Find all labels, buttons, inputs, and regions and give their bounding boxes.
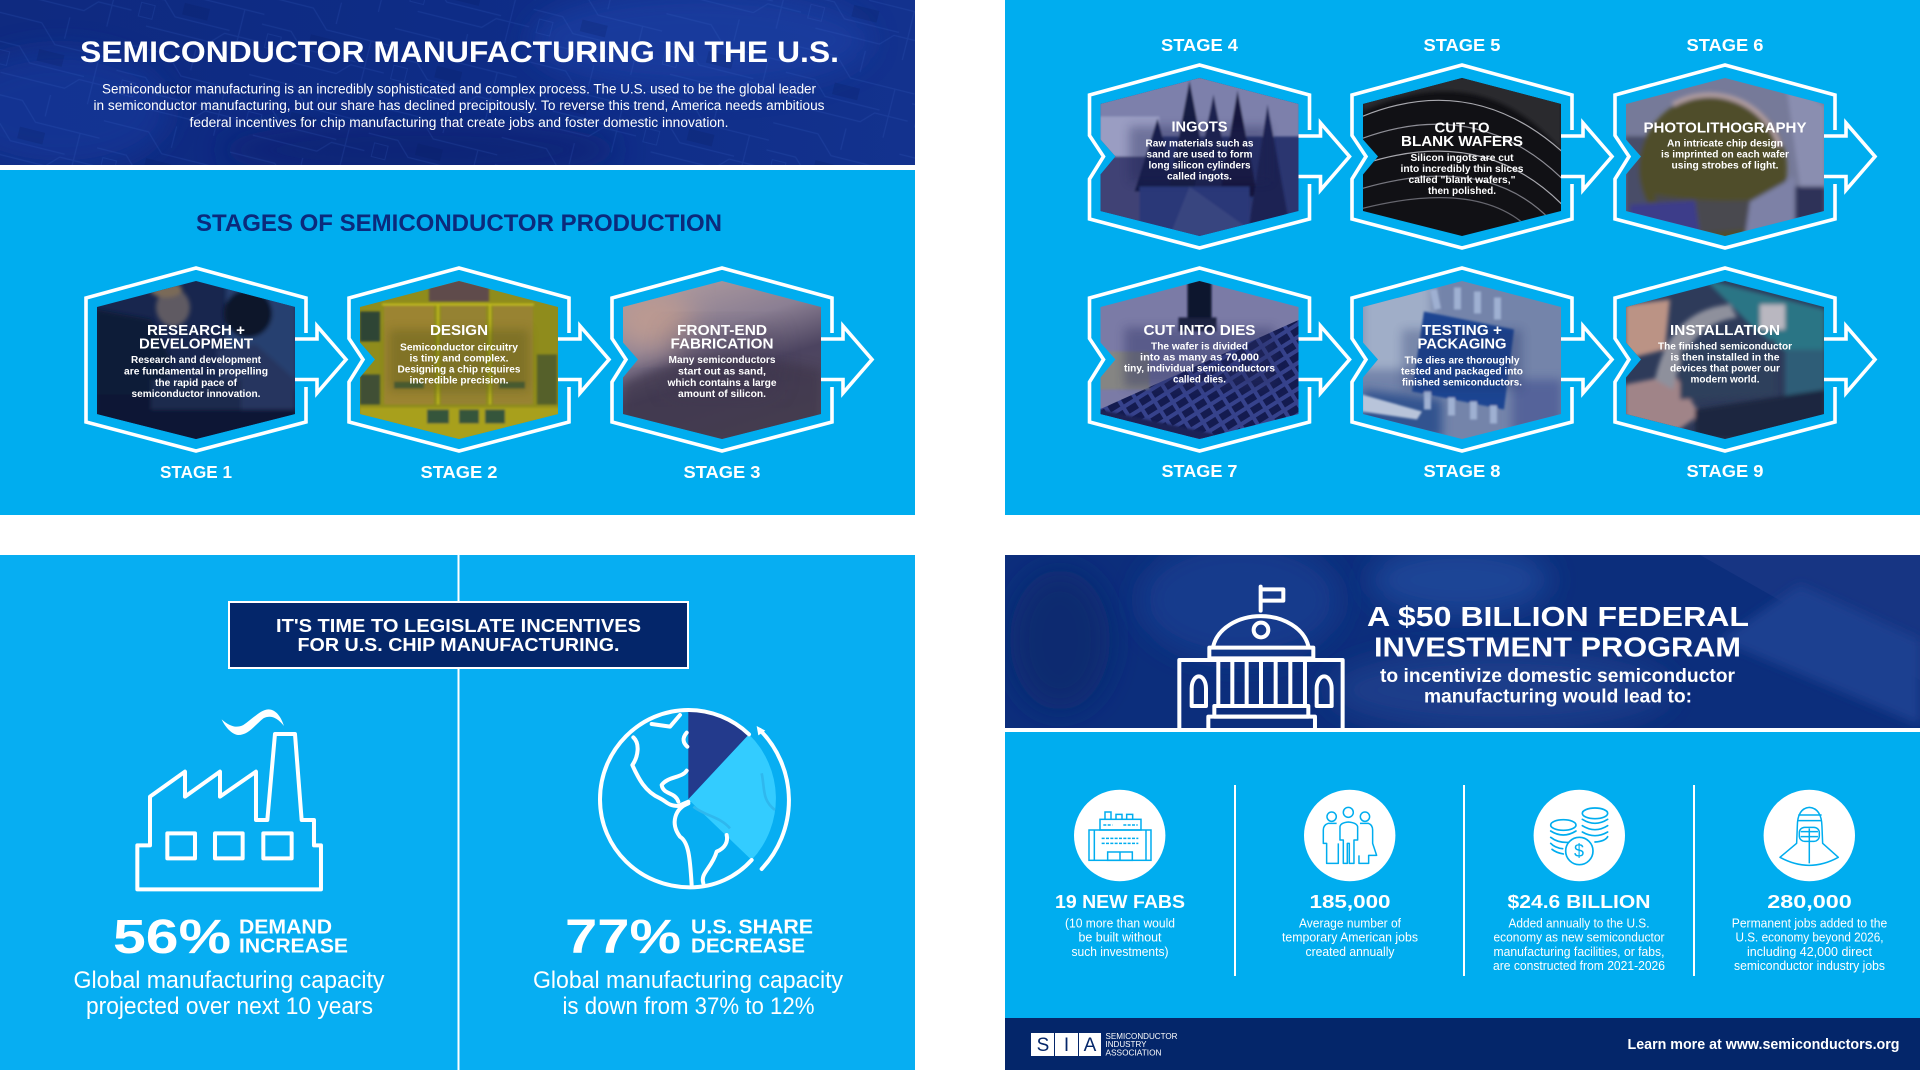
photo: dicing saw	[1100, 278, 1300, 444]
stage text	[1644, 120, 1806, 172]
stage text: into as many as 70,000	[1140, 352, 1259, 364]
stage text: called dies.	[1173, 374, 1226, 386]
stage text: semiconductor innovation.	[132, 388, 261, 400]
logo: SIA: SEMICONDUCTOR	[1106, 1031, 1178, 1041]
stage text: Semiconductor circuitry	[400, 342, 518, 354]
stage text: into incredibly thin slices	[1400, 163, 1524, 175]
intro paragraph: in semiconductor manufacturing, but our share has declined precipitously. To reverse this trend, America needs ambitious	[94, 98, 825, 113]
hexagon outline	[86, 268, 306, 451]
stat: 185,000 temporary jobs: Average number of	[1299, 916, 1401, 930]
stat: 24.6 billion added	[1493, 790, 1665, 973]
icon: coins: $	[1574, 841, 1584, 861]
stage text: which contains a large	[667, 377, 777, 389]
arrow	[1298, 326, 1350, 393]
stage text: called ingots.	[1167, 170, 1232, 182]
stage labels 1-3	[160, 462, 761, 482]
stage 3: front-end fabrication	[612, 268, 872, 451]
website link text: Learn more at www.semiconductors.org	[1628, 1036, 1900, 1053]
stat: 280,000 permanent jobs: U.S. economy beyond 2026,	[1736, 930, 1884, 944]
stage text	[398, 322, 521, 386]
stat: 56 percent demand increase: DEMAND	[239, 916, 332, 938]
stat: 185,000 temporary jobs	[1282, 790, 1418, 959]
stat: 77 percent share decrease: is down from 37% to 12%	[562, 993, 814, 1020]
main title: SEMICONDUCTOR MANUFACTURING IN THE U.S.	[80, 36, 839, 69]
stage text: DEVELOPMENT	[139, 336, 253, 352]
stage text: is imprinted on each wafer	[1661, 148, 1789, 160]
stage text: are fundamental in propelling	[124, 366, 268, 378]
icon: capitol building	[1179, 587, 1343, 728]
stage text: An intricate chip design	[1667, 138, 1783, 150]
stage text: Raw materials such as	[1146, 138, 1254, 150]
hexagon outline	[1090, 268, 1310, 451]
stage text: Research and development	[131, 354, 261, 366]
hexagon outline	[612, 268, 832, 451]
stage text: tested and packaged into	[1401, 366, 1523, 378]
stat: 280,000 permanent jobs: Permanent jobs added to the	[1732, 916, 1887, 930]
logo: SIA: INDUSTRY	[1106, 1039, 1147, 1049]
stage text: tiny, individual semiconductors	[1124, 362, 1275, 374]
footer bar	[1005, 1018, 1920, 1070]
stage text	[1146, 118, 1254, 182]
stat: 56 percent demand increase: projected over next 10 years	[86, 993, 373, 1020]
panel: title and stages 1-3	[0, 0, 915, 515]
stage text	[1658, 322, 1792, 386]
program heading: INVESTMENT PROGRAM	[1374, 632, 1741, 662]
stat: 24.6 billion added: are constructed from 2021-2026	[1493, 959, 1665, 973]
stage text: incredible precision.	[410, 374, 509, 386]
header band with photo background	[1005, 540, 1920, 732]
stage text: Many semiconductors	[668, 354, 776, 366]
stage text: PACKAGING	[1418, 336, 1506, 352]
stage labels 1-3: STAGE 1	[160, 462, 232, 482]
stat: 19 new fabs: be built without	[1078, 930, 1162, 944]
panel: stages 4-9	[1005, 0, 1920, 515]
logo: SIA: I	[1064, 1035, 1069, 1056]
arrow	[1561, 326, 1612, 393]
stage text: FABRICATION	[670, 336, 774, 352]
stage text: long silicon cylinders	[1148, 160, 1251, 172]
header band with circuit board background	[0, 0, 915, 180]
logo: SIA: A	[1084, 1035, 1097, 1056]
stage text: The finished semiconductor	[1658, 340, 1792, 352]
intro paragraph: Semiconductor manufacturing is an incredibly sophisticated and complex process. The U.S. used to be the global leader	[102, 82, 817, 96]
logo: SIA	[1031, 1031, 1178, 1058]
stage text: finished semiconductors.	[1402, 376, 1522, 388]
arrow	[1298, 123, 1350, 190]
hexagon outline	[1352, 268, 1572, 451]
stage 7: cut into dies	[1090, 268, 1350, 451]
stage text: RESEARCH +	[147, 322, 245, 339]
stage 2: design	[349, 268, 609, 451]
stat: 24.6 billion added: manufacturing facilities, or fabs,	[1494, 945, 1664, 959]
stat: 56 percent demand increase	[74, 911, 384, 1020]
stat: 185,000 temporary jobs: 185,000	[1310, 891, 1390, 912]
stage labels 7-9	[1162, 461, 1764, 481]
photo: wafers	[1362, 76, 1562, 236]
hexagon outline	[1615, 268, 1835, 451]
hexagon outline	[1615, 65, 1835, 248]
program heading: manufacturing would lead to:	[1424, 686, 1692, 708]
intro paragraph	[94, 82, 825, 130]
stat: 280,000 permanent jobs: semiconductor industry jobs	[1734, 959, 1885, 973]
stage text	[1124, 322, 1275, 386]
stat: 77 percent share decrease: U.S. SHARE	[691, 916, 813, 938]
icon: cleanroom worker	[1764, 790, 1855, 881]
program heading	[1367, 601, 1749, 708]
stage text: modern world.	[1690, 374, 1760, 386]
stage text: is then installed in the	[1670, 352, 1780, 364]
stat: 19 new fabs: such investments)	[1072, 945, 1168, 959]
intro paragraph: federal incentives for chip manufacturing that create jobs and foster domestic innovation.	[190, 115, 728, 130]
stat: 77 percent share decrease: 77%	[565, 911, 681, 964]
section heading: STAGES OF SEMICONDUCTOR PRODUCTION	[196, 210, 722, 237]
stage text: Designing a chip requires	[398, 364, 521, 376]
stage text: called "blank wafers,"	[1408, 174, 1516, 186]
stage text: The dies are thoroughly	[1404, 354, 1520, 366]
arrow	[558, 326, 609, 393]
stage text: CUT INTO DIES	[1144, 322, 1256, 339]
stage text: is tiny and complex.	[410, 352, 509, 364]
program heading: A $50 BILLION FEDERAL	[1367, 601, 1749, 632]
logo: SIA: S	[1037, 1035, 1049, 1056]
stat: 77 percent share decrease: DECREASE	[691, 936, 805, 958]
stage 6: photolithography	[1615, 65, 1875, 248]
stat: 185,000 temporary jobs: temporary American jobs	[1282, 930, 1418, 944]
stage labels 1-3: STAGE 2	[420, 462, 498, 482]
stage text	[1400, 120, 1524, 197]
stage text: amount of silicon.	[678, 388, 766, 400]
stat: 19 new fabs	[1055, 790, 1185, 959]
stage text: PHOTOLITHOGRAPHY	[1644, 120, 1806, 136]
arrow	[1824, 326, 1875, 393]
program heading: to incentivize domestic semiconductor	[1380, 666, 1736, 687]
stat: 56 percent demand increase: 56%	[113, 911, 231, 964]
photo: chip layout	[359, 280, 560, 444]
arrow	[295, 326, 346, 393]
hexagon outline	[349, 268, 569, 451]
arrow	[1561, 123, 1612, 190]
stage 5: cut to blank wafers	[1352, 65, 1612, 248]
callout box: IT'S TIME TO LEGISLATE INCENTIVES	[276, 615, 641, 636]
stage text: then polished.	[1428, 185, 1496, 197]
photo: wafer under light	[1625, 76, 1825, 242]
stage text: Silicon ingots are cut	[1410, 152, 1514, 164]
photo: researchers	[96, 280, 296, 450]
stage text: the rapid pace of	[155, 377, 237, 389]
icon: people	[1304, 790, 1395, 881]
panel: federal investment program	[1005, 540, 1920, 1070]
stat: 77 percent share decrease: Global manufacturing capacity	[533, 967, 843, 994]
icon: coins	[1534, 790, 1625, 881]
stage 9: installation	[1615, 268, 1875, 451]
panel: call to legislate	[0, 555, 915, 1070]
arrow	[821, 326, 872, 393]
photo: silicon ingots	[1100, 76, 1300, 236]
photo: packaged chip	[1362, 280, 1562, 440]
stat: 19 new fabs: (10 more than would	[1065, 916, 1175, 930]
arrow	[1824, 123, 1875, 190]
hexagon outline	[1090, 65, 1310, 248]
stage labels 4-6: STAGE 4	[1161, 35, 1238, 55]
icon: factory	[137, 709, 321, 889]
stage text: DESIGN	[430, 322, 488, 339]
stage text: INSTALLATION	[1670, 322, 1780, 339]
stat: 24.6 billion added: $24.6 BILLION	[1508, 891, 1650, 912]
dividers	[1234, 785, 1695, 976]
stage labels 7-9: STAGE 7	[1162, 461, 1238, 481]
stat: 56 percent demand increase: INCREASE	[239, 936, 348, 958]
stage text: sand are used to form	[1146, 148, 1252, 160]
stage labels 4-6	[1161, 35, 1764, 55]
stage labels 4-6: STAGE 5	[1424, 35, 1501, 55]
stage 1: research and development	[86, 268, 346, 451]
stage text: The wafer is divided	[1151, 340, 1248, 352]
stage 8: testing and packaging	[1352, 268, 1612, 451]
stage text: devices that power our	[1670, 362, 1780, 374]
stage labels 1-3: STAGE 3	[684, 462, 761, 482]
stage 4: ingots	[1090, 65, 1350, 248]
stage text: using strobes of light.	[1672, 160, 1779, 172]
logo: SIA: ASSOCIATION	[1106, 1048, 1162, 1058]
stage text	[124, 322, 268, 400]
stage text: FRONT-END	[677, 322, 767, 339]
stage labels 4-6: STAGE 6	[1686, 35, 1764, 55]
stat: 280,000 permanent jobs	[1732, 790, 1887, 973]
photo: installing a chip in a device	[1625, 280, 1825, 440]
stage text: TESTING +	[1422, 322, 1502, 339]
stage text: start out as sand,	[678, 366, 766, 378]
stage text	[667, 322, 777, 400]
stat: 24.6 billion added: Added annually to the U.S.	[1508, 916, 1650, 930]
stat: 77 percent share decrease	[533, 911, 843, 1020]
stat: 56 percent demand increase: Global manufacturing capacity	[74, 967, 384, 994]
icon: fab building	[1074, 790, 1165, 881]
stat: 19 new fabs: 19 NEW FABS	[1055, 891, 1185, 912]
stat: 280,000 permanent jobs: including 42,000 direct	[1747, 945, 1873, 959]
stage text: CUT TO	[1434, 120, 1490, 136]
stat: 185,000 temporary jobs: created annually	[1306, 945, 1395, 959]
stage text	[1401, 322, 1523, 388]
photo: sand	[612, 280, 822, 444]
hexagon outline	[1352, 65, 1572, 248]
stage text: INGOTS	[1172, 118, 1228, 136]
stat: 24.6 billion added: economy as new semiconductor	[1494, 930, 1664, 944]
callout box	[229, 602, 688, 668]
stage text: BLANK WAFERS	[1401, 133, 1523, 150]
stage labels 7-9: STAGE 8	[1424, 461, 1501, 481]
stat: 280,000 permanent jobs: 280,000	[1767, 891, 1852, 912]
callout box: FOR U.S. CHIP MANUFACTURING.	[298, 634, 620, 655]
stage labels 7-9: STAGE 9	[1686, 461, 1764, 481]
icon: globe with pie wedge	[600, 709, 789, 887]
